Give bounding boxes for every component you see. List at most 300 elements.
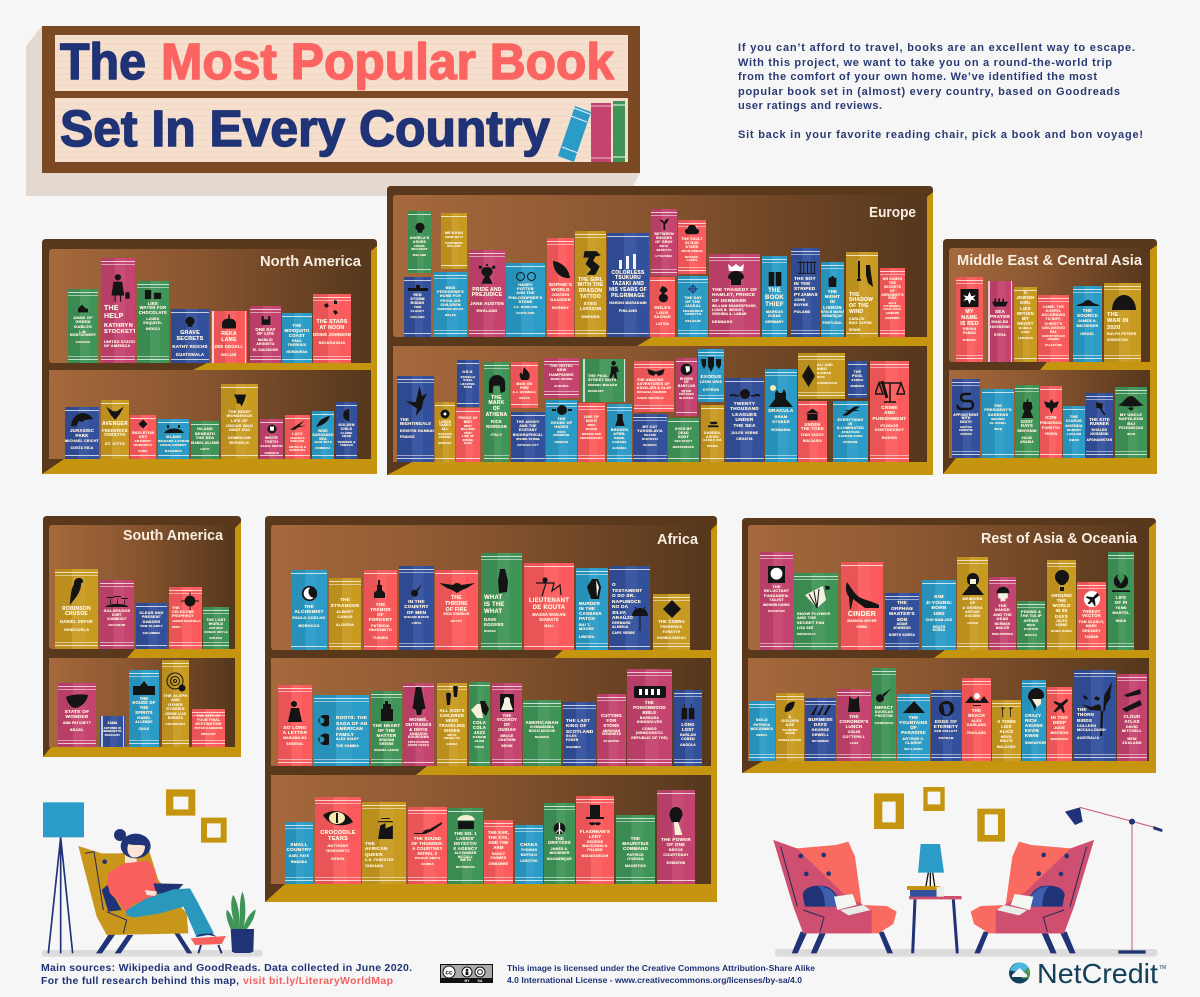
book: The Nightingale: NIGHTINGALE [400, 421, 431, 426]
icon: fence [798, 261, 816, 274]
book: The Amazing Adventures of Kavalier & Clay: THE AMAZING [637, 378, 664, 382]
book: A Town Like Alice: ALICE [1000, 729, 1014, 734]
book: Wide Sargasso Sea: JEAN RHYS [314, 440, 332, 444]
book: One Day of Life [250, 306, 281, 363]
book: Around the World in 80 Days: DAYS [1055, 614, 1068, 619]
book: The Throne of Fire: THRONE [445, 600, 468, 606]
book: Harry Potter and the Philosopher's Stone [506, 263, 545, 337]
book: The Shadow of the Wind: WIND [849, 309, 863, 315]
book: The War in 2020 [1104, 283, 1141, 362]
book: Murder in the Cassava Patch: MOORE [579, 627, 594, 631]
book: The President's Gardens: IRAQ [994, 427, 1002, 431]
book: Kim Ji-young, Born 1982: KOREA [933, 628, 945, 632]
book: Colorless Tsukuru Tazaki and His Years of Pilgrimage: HARUKI MURAKAMI [609, 301, 647, 305]
book: The Heart of the Matter: MATTER [377, 733, 396, 738]
book: The Drifters [544, 803, 575, 884]
book: Long Lost: HARLAN [680, 733, 696, 737]
icon: figures banner [634, 686, 666, 698]
book: Lamb: The Gospel According to Biff: CHRISTOPHER [1042, 334, 1065, 338]
book: Chaka: CHAKA [520, 842, 538, 847]
icon: jet roundel [1082, 590, 1100, 608]
book: Murder in the Cassava Patch: LIBERIA [579, 635, 595, 639]
book: Garden, Ashes: GARDEN, [704, 430, 721, 434]
book: Colorless Tsukuru Tazaki and His Years of Pilgrimage: TSUKURU [615, 275, 641, 281]
icon: woman in glasses [1026, 688, 1044, 711]
book: The Paul Street Boys [582, 359, 626, 402]
book: O Testamento do Sr. Napumoceno: NO DA [612, 604, 628, 609]
book: The Beach: THAILAND [967, 731, 986, 735]
book: In the Country of Men: COUNTRY [404, 604, 429, 609]
book: The Orphan Master's Son [885, 593, 919, 650]
book: The Mosquito Coast: THE [292, 323, 302, 328]
book: Twenty Thousand Leagues Under the Sea: CROATIA [736, 437, 753, 441]
book: Red Storm Rising: RED [413, 292, 422, 296]
book: Reka Lame: ZEE EDGELL [215, 344, 243, 349]
book: Andorra title: OF [890, 289, 895, 293]
book: Pride and Prejudice: ENGLAND [477, 308, 497, 313]
book: Threat Vector: GREANEY [1082, 629, 1101, 633]
book: The Aleph and Other Stories: JORGE LUIS [165, 712, 186, 716]
book: Icon: FREDERICK [1040, 421, 1062, 425]
book: A Town Like Alice: A TOWN [997, 718, 1016, 724]
book: Loser Takes All: LOSER [439, 420, 451, 424]
book: The Mark of Athena: RICK [491, 419, 502, 424]
book: The Naked and the Dead: AND THE [993, 612, 1012, 617]
book: The Nightingale: THE [400, 416, 409, 422]
book: Robinson Crusoe: VENEZUELA [64, 627, 89, 632]
book: Red Storm Rising: STORM [410, 297, 425, 301]
icon: tooth [268, 424, 276, 434]
book: The Tremor of Forgery: HIGHSMITH [369, 628, 392, 632]
book: Crocodile Tears: HOROWITZ [326, 848, 350, 853]
book: Roots: FAMILY [336, 732, 354, 737]
book: The Stranger: STRANGER [331, 604, 359, 609]
book: Lamb: The Gospel According to Biff: LAMB: THE [1043, 305, 1064, 309]
book: A Jewish Girl Lies Within My Heart: LIES [1020, 306, 1031, 311]
book: Over My Dead Body: BODY [678, 435, 689, 439]
book: The Help: KATHRYN [104, 323, 133, 329]
icon: nightingale [406, 386, 427, 416]
book: Miss Peregrine's Home for Peculiar Children: PEREGRINE'S [437, 290, 464, 294]
book: State of Wonder: BRAZIL [70, 728, 84, 732]
icon: island palms [105, 595, 129, 607]
book: The Mark of Athena: RIORDAN [486, 424, 507, 429]
book: The No. 1 Ladies' Detective Agency [448, 808, 483, 884]
icon: silhouette [478, 264, 496, 284]
book: Broken April: ALBANIA [612, 446, 627, 450]
icon: house [806, 408, 819, 421]
book: Snow Flower and the Secret Fan: SNOW FLOWER [797, 610, 830, 616]
book: The Reluctant Fundamentalist: RELUCTANT [764, 588, 789, 593]
book: Impact: DOUGLAS [875, 710, 893, 714]
book: Around the World in 80 Days: VERNE [1055, 623, 1068, 627]
panel: South America [43, 516, 241, 757]
book: The Alchemist [291, 570, 327, 650]
icon: lizard [658, 286, 668, 302]
book: The Celestine Prophecy: THE [172, 606, 180, 610]
book: Around the World in 80 Days [1047, 560, 1076, 650]
book: The Tragedy of Hamlet, Prince of Denmark: WILLIAM SHAKESPEARE, [712, 304, 757, 308]
book: The Lost World: BOLIVIA [210, 636, 222, 640]
book: The Boy in the Striped Pyjamas: THE BOY [794, 276, 816, 280]
book: The Throne of Fire: OF FIRE [446, 606, 467, 612]
book: Rivers of Babylon: OF [684, 380, 689, 384]
book: The Drifters: MICHENER [549, 851, 570, 855]
icon: windows [768, 272, 782, 286]
book: Avenger: ST. KITTS [105, 441, 125, 446]
book: The Day of the Jackal: THE DAY [684, 296, 702, 300]
icon: leaf [784, 701, 796, 713]
book: Life of Pi: MARTEL [1112, 611, 1130, 615]
book: The City of Your Final Destination: YOUR FINAL [197, 718, 220, 722]
logo: NetCredit: TM [1159, 965, 1166, 971]
book: O Testamento do Sr. Napumoceno: ARAÚJO [612, 615, 633, 620]
book: The Reluctant Fundamentalist: FUNDAMEN- [764, 593, 789, 598]
book: Cinder: CINDER [848, 610, 876, 618]
book: Cola Cola Jazz: TOGO [475, 745, 484, 749]
book: The Kite Runner: HOSSEINI [1090, 432, 1109, 436]
book: The Night in Lisbon: IN [830, 299, 835, 304]
book: The Orphan Master's Son: NORTH KOREA [889, 633, 915, 637]
book: The House of Hades: HADES [554, 425, 569, 429]
book: Appointment with Death: APPOINTMENT [953, 412, 979, 416]
book: The Mosquito Coast [282, 313, 312, 363]
book: Roots: ALEX HALEY [336, 737, 359, 741]
book: O Testamento do Sr. Napumoceno: TESTAMENT [612, 588, 642, 593]
icon: top hat and moustache [586, 805, 604, 827]
book: My Uncle Napoleon: IRAJ [1127, 422, 1135, 426]
book: The Icarus Agenda [1063, 406, 1085, 458]
book: Chaka: MOFOLO [521, 852, 537, 856]
book: The Mark of Athena [484, 362, 509, 462]
book: The Thorn Birds: THORN [1077, 712, 1094, 717]
book: My Uncle Napoleon: NAPOLEON [1119, 416, 1143, 421]
book: The Pool: POOL [852, 374, 863, 378]
book: Angela's Ashes: FRANK [414, 244, 425, 248]
icon: goat head [1020, 398, 1034, 418]
icon: head [680, 363, 693, 376]
book: The Viceroy of Ouidah: OUIDAH [498, 727, 516, 732]
book: The Fault in Our Stars: IN OUR [685, 241, 699, 245]
book: The House of Hades: RIORDAN [553, 433, 570, 437]
book: Lamb: The Gospel According to Biff: GOSPEL [1046, 309, 1061, 313]
book: Rivers of Babylon: BABYLON [678, 384, 695, 388]
book: White Teeth: WHITE [265, 436, 278, 440]
book: Sea Prayer: PRAYER [990, 314, 1010, 319]
book: Lamb: The Gospel According to Biff: MOORE [1048, 337, 1059, 341]
book: What Is the What: WHAT [484, 609, 502, 615]
icon: bars [619, 254, 636, 269]
book: Sophie's World: JOSTEIN [552, 293, 569, 297]
book: Loser Takes All: GREENE [439, 436, 451, 439]
book: Reka Lame [211, 311, 247, 363]
book: My Cat Yugoslavia: MY CAT [643, 425, 657, 429]
book: Threat Vector: TAIWAN [1085, 635, 1098, 639]
icon: boat [992, 298, 1008, 307]
book: Americanah: NIGERIA [535, 735, 549, 739]
book: My Name Is Red: PAMUK [963, 331, 976, 335]
icon: feather [553, 261, 570, 278]
book: Icon [1040, 386, 1062, 458]
book: The Girl with the Dragon Tattoo: DRAGON [579, 288, 602, 294]
book: My Name Is Red: TURKEY [962, 338, 977, 342]
book: Burmese Days: GEORGE [812, 728, 829, 732]
book: The Coroner's Lunch: LAOS [850, 741, 858, 745]
book: Appointment with Death: WITH [961, 416, 971, 420]
book: The African Queen: AFRICAN [365, 846, 388, 851]
book: The Day of the Jackal: JACKAL [685, 304, 701, 308]
footer sources note [41, 960, 413, 988]
book: Avenger: FORSYTH [104, 432, 126, 437]
book: The Book Thief: ZUSAK [768, 314, 781, 318]
book: The Day of the Jackal: BELGIUM [685, 319, 701, 323]
icon: chains [317, 715, 329, 745]
book: The Ear, the Eye and the Arm: FARMER [491, 856, 506, 860]
book: Sold: SOLD [756, 717, 768, 722]
book: Cutting for Stone: CUTTING [601, 713, 622, 718]
book: The Heart of the Matter: OF THE [378, 728, 395, 733]
book: The Thorn Birds: THE [1077, 707, 1087, 712]
book: Cutting for Stone: ABRAHAM [603, 728, 620, 732]
book: Lamb: The Gospel According to Biff [1038, 295, 1069, 362]
book: The Tremor of Forgery: PATRICIA [371, 624, 390, 628]
book: The Mauritius Command [616, 815, 655, 884]
icon: half moon [343, 409, 350, 421]
book: The Heart of the Matter [371, 691, 402, 766]
book: Red Storm Rising: TOM [414, 305, 421, 309]
book: Between Shades of Gray: OF GRAY [655, 240, 673, 244]
book: The Boy in the Striped Pyjamas: IN THE [794, 281, 810, 286]
book: Flashman's Lady: FRASER [587, 848, 603, 852]
book: Peking & the Tulip Affair [1017, 601, 1045, 650]
book: The Boy in the Striped Pyjamas: STRIPED [794, 286, 815, 291]
book: The Paul Street Boys: HUNGARY [588, 389, 604, 393]
book: The Beach [962, 678, 991, 761]
book: The Alchemist: THE [304, 604, 314, 608]
book: O Testamento do Sr. Napumoceno: ALMEIDA [612, 625, 628, 629]
book: Ali and Nino: KURBAN [817, 371, 831, 375]
panel: North America [42, 239, 377, 474]
book: The Brief Wondrous Life of Oscar Wao: THE BRIEF [228, 408, 251, 414]
book: Clear and Present Danger: PRESENT [142, 615, 161, 619]
book: The Fountains of Paradise: THE [909, 714, 918, 720]
book: Andorra title: O'CONNELL [884, 305, 901, 308]
book: The Mark of Athena: THE [491, 394, 502, 400]
illustration: two armchairs, table and lamp [760, 770, 1180, 960]
book: Prince of Mist: ELSIE [464, 442, 472, 445]
book: So Long a Letter: MARIAMA BÂ [283, 736, 307, 740]
icon: mountain palms [902, 701, 924, 713]
book: The Brief Wondrous Life of Oscar Wao: REPUBLIC [229, 441, 250, 445]
book: Mr Khan: MR KHAN [445, 231, 463, 235]
book: Exodus: EXODUS [701, 374, 721, 378]
book: The Coroner's Lunch: LUNCH [846, 724, 862, 729]
book: The Stars at Noon: THE STARS [316, 318, 348, 324]
book: Between Shades of Gray: SHADES [656, 236, 672, 240]
book: Kim Ji-young, Born 1982: JI-YOUNG: [926, 601, 952, 606]
icon: skull [415, 222, 425, 233]
book: The Shadow of the Wind: OF THE [849, 303, 869, 309]
book: The Tragedy of Hamlet, Prince of Denmark [709, 254, 760, 337]
book: The Book Thief: MARKUS [766, 310, 783, 314]
book: Reka Lame: REKA [221, 330, 237, 336]
book: The Last King of Scotland [563, 702, 596, 766]
book: The City of Your Final Destination [192, 709, 225, 747]
book: The Hotel New Hampshire: NEW [557, 368, 566, 372]
book: Island Beneath the Sea: BENEATH [195, 431, 215, 436]
book: All God's Children Need Traveling Shoes: SHOES [444, 728, 460, 733]
book: The Mauritius Command: MAURITIUS [622, 841, 649, 846]
book: All God's Children Need Traveling Shoes: GHANA [446, 742, 458, 746]
book: Around the World in 80 Days: HONG KONG [1051, 629, 1072, 633]
book: Goat Days: SAUDI [1021, 436, 1033, 440]
book: The Icarus Agenda: THE [1070, 415, 1078, 419]
icon: figure [614, 414, 624, 426]
book: The Naked and the Dead: PHILIPPINES [992, 632, 1013, 636]
book: Sold [749, 701, 775, 761]
book: Lucy [285, 415, 310, 459]
icon: snake badge [662, 600, 680, 618]
book: The Alchemist: PAULO COELHO [292, 616, 326, 620]
book: Reka Lame: LAME [221, 337, 237, 343]
book: The Help: OF AMERICA [104, 344, 130, 348]
book: A Golden Age: AGE [786, 723, 794, 727]
book: The Kite Runner: AFGHANISTAN [1087, 438, 1112, 442]
book: The President's Gardens [982, 389, 1014, 458]
book: Over My Dead Body [668, 418, 699, 462]
book: The Drifters: THE [555, 836, 564, 840]
book: The Tragedy of Hamlet, Prince of Denmark: LOUIS B. WRIGHT, [712, 308, 744, 312]
book: Golden Child: ADAM [342, 434, 351, 438]
book: Robinson Crusoe: ROBINSON [62, 606, 91, 612]
panel: Africa [265, 516, 717, 902]
book: Lieutenant de Kouta: MALI [545, 624, 553, 628]
book: The House of the Spirits: THE [140, 696, 148, 700]
icon: sprout [659, 218, 669, 230]
icon: wing [409, 583, 424, 597]
book: A Golden Age: ANAM [785, 731, 795, 735]
book: Under the Yoke: THE YOKE [801, 426, 824, 431]
icon: submarine [408, 285, 428, 291]
title sign [26, 26, 640, 196]
book: The Day of the Jackal [678, 276, 708, 337]
book: The Hotel New Hampshire: HAMPSHIRE [549, 373, 574, 377]
book: Twenty Thousand Leagues Under the Sea [725, 378, 764, 462]
book: My Uncle Napoleon: MY UNCLE [1120, 412, 1142, 416]
book: Lamb: The Gospel According to Biff: PAL [1050, 330, 1057, 334]
book: The Beach: GARLAND [967, 723, 986, 727]
book: Andorra title: HOWARD [886, 312, 899, 315]
book: The Throne of Fire: RICK RIORDAN [444, 612, 469, 616]
book: Jurassic Park: COSTA RICA [70, 446, 94, 450]
book: Galapagos: GALÁPAGOS [104, 608, 130, 612]
book: The Agony and the Ecstasy: BIOGRAPHICAL [513, 433, 543, 437]
book: Kim Ji-young, Born 1982: 1982 [933, 612, 945, 617]
book: The African Queen: QUEEN [365, 852, 383, 857]
book: Broken April [607, 404, 632, 462]
book: One Day of Life: MANLIO [258, 338, 273, 342]
book: The Thorn Birds: COLLEEN [1077, 724, 1096, 728]
book: Cola Cola Jazz: JAZZ [474, 730, 485, 735]
panel: Rest of Asia and Oceania: Rest of Asia & Oceania [981, 530, 1138, 547]
book: The Mauritius Command: COMMAND [623, 846, 648, 851]
book: Lucy: BARBUDA [290, 448, 305, 452]
book: The Stranger: ALBERT [336, 609, 354, 614]
book: Avenger [101, 400, 129, 459]
book: Andorra title: SECRETS [884, 285, 901, 289]
book: The Stars at Noon: AT NOON [319, 325, 345, 331]
book: The Mosquito Coast: THEROUX [288, 343, 306, 347]
book: Pride and Prejudice: JANE AUSTEN [470, 301, 504, 306]
book: All God's Children Need Traveling Shoes: CHILDREN [440, 713, 464, 718]
book: Prince of Mist: LINE UP [462, 435, 474, 438]
book: The Mauritius Command: O'BRIAN [627, 857, 644, 861]
book: Appointment with Death [952, 379, 980, 458]
book: Robinson Crusoe: DANIEL DEFOE [60, 618, 93, 624]
book: Edge of Eternity: KEN FOLLETT [934, 729, 958, 733]
intro text: If you can’t afford to travel, books are an excellent way to escape. [738, 42, 1135, 54]
book: Everything Is Illuminated: JONATHAN [841, 430, 860, 434]
book: Murder in the Cassava Patch: CASSAVA [579, 611, 602, 616]
book: The Tremor of Forgery: TREMOR [370, 607, 391, 612]
book: Jurassic Park: PARK [76, 433, 88, 438]
icon: sun [181, 592, 199, 610]
book: Snow Flower and the Secret Fan: MONGOLIA [797, 632, 816, 636]
icon: maid [111, 274, 130, 302]
book: Islands: CRAIG ROBERT [160, 443, 187, 447]
book: Angela's Ashes: ANGELA'S [410, 236, 429, 240]
book: The Tremor of Forgery: OF [377, 612, 384, 617]
icon: flame [520, 367, 530, 380]
book: The Stranger: THE [340, 598, 350, 603]
book: Murder in the Cassava Patch: IN THE [579, 606, 595, 611]
book: The Mark of Athena: MARK [489, 400, 504, 406]
icon: lantern [380, 701, 394, 721]
book: The Girl with the Dragon Tattoo: WITH THE [578, 282, 603, 288]
icon: emblem [552, 405, 572, 415]
book: Harry Potter and the Philosopher's Stone: POTTER [517, 287, 534, 291]
book: Skeleton Key: CUBA [138, 449, 148, 453]
book: Sea Prayer: KHALED [991, 320, 1008, 324]
book: Roots: SAGA OF AN [336, 721, 367, 726]
book: The Last King of Scotland: SCOTLAND [566, 729, 593, 734]
book: Exodus [698, 349, 724, 402]
book: All God's Children Need Traveling Shoes: ANGELOU [444, 736, 460, 740]
book: Life of Pi: INDIA [1116, 619, 1126, 623]
book: Andorra title: ARROWBY'S [881, 292, 904, 296]
book: The Poisonwood Bible: BARBARA [640, 716, 659, 720]
book: The Agony and the Ecstasy: AND THE [519, 424, 537, 428]
book: Grave Secrets: GRAVE [180, 330, 200, 336]
book: The House of the Spirits [129, 670, 159, 747]
book: The House of the Spirits: SPIRITS [135, 710, 153, 715]
book: The Coroner's Lunch: COLIN [848, 730, 860, 734]
book: The Brief Wondrous Life of Oscar Wao: JUNOT DÍAZ [229, 428, 250, 432]
book: Life of Pi: OF PI [1114, 600, 1128, 605]
book: Dracula: BRAM [775, 414, 787, 419]
book: Crazy Rich Asians [1022, 680, 1046, 761]
icon: landscape [1076, 298, 1100, 306]
icon: tower [828, 276, 836, 287]
book: Garden, Ashes: DANILO KIŠ [703, 438, 722, 442]
book: Skeleton Key: HOROWITZ [134, 443, 152, 447]
book: The War in 2020: KURDISTAN [1107, 338, 1128, 342]
book: The City of Your Final Destination: DESTINATION [196, 722, 221, 726]
book: Monné, Outrages and Defiance: MONNÉ, [409, 716, 428, 722]
footer sources note: For the full research behind this map, [41, 975, 239, 987]
book: The Mauritius Command: MAURITIUS [625, 864, 646, 868]
book: Galapagos: VONNEGUT [107, 617, 127, 621]
